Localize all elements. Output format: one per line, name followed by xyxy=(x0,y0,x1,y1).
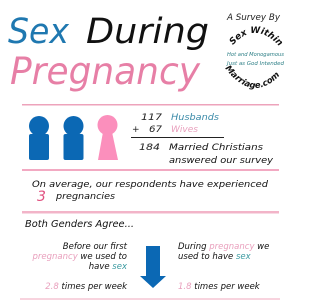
survey credit logo xyxy=(225,13,285,90)
survey count sum xyxy=(131,113,274,166)
icon: husband xyxy=(29,116,49,160)
pregnancies statement xyxy=(32,180,268,205)
survey count sum: answered our survey xyxy=(169,156,274,166)
pregnancies statement: pregnancies xyxy=(55,192,115,202)
icon: husband xyxy=(64,116,84,160)
section heading: Both Genders Agree... xyxy=(25,219,134,230)
survey credit logo: Hot and Monogamous xyxy=(227,52,284,58)
pregnancies statement: 3 xyxy=(37,189,46,205)
before pregnancy column: pregnancy we used to xyxy=(32,252,127,262)
divider xyxy=(22,169,279,171)
divider xyxy=(22,104,279,106)
title: Sex xyxy=(8,12,69,52)
icon: wife xyxy=(98,115,118,160)
bottom divider xyxy=(20,298,280,300)
during pregnancy column: During pregnancy we xyxy=(178,242,269,252)
survey count sum: Husbands xyxy=(171,113,219,123)
survey count sum: Married Christians xyxy=(169,143,263,153)
survey credit logo: A Survey By xyxy=(226,13,281,23)
survey count sum: 117 xyxy=(141,113,162,123)
survey count sum: Wives xyxy=(171,125,198,135)
during pregnancy column xyxy=(178,242,269,292)
survey count sum: + xyxy=(132,125,140,135)
before pregnancy column xyxy=(32,242,128,292)
survey credit logo: Just as God Intended xyxy=(226,61,285,67)
survey count sum: 67 xyxy=(149,125,162,135)
during pregnancy column: 1.8 times per week xyxy=(178,282,261,292)
title: During xyxy=(86,12,209,52)
during pregnancy column: used to have sex xyxy=(178,252,252,262)
divider xyxy=(22,211,279,214)
before pregnancy column: Before our first xyxy=(63,242,128,252)
arrow: decrease xyxy=(140,246,166,288)
survey credit logo: Marriage.com xyxy=(225,65,279,90)
before pregnancy column: have sex xyxy=(89,262,128,272)
survey credit logo: Sex Within xyxy=(230,26,282,46)
before pregnancy column: 2.8 times per week xyxy=(45,282,128,292)
title: Pregnancy xyxy=(10,50,201,93)
pregnancies statement: On average, our respondents have experienced xyxy=(32,180,268,190)
title xyxy=(8,12,209,93)
survey count sum: 184 xyxy=(139,143,160,153)
